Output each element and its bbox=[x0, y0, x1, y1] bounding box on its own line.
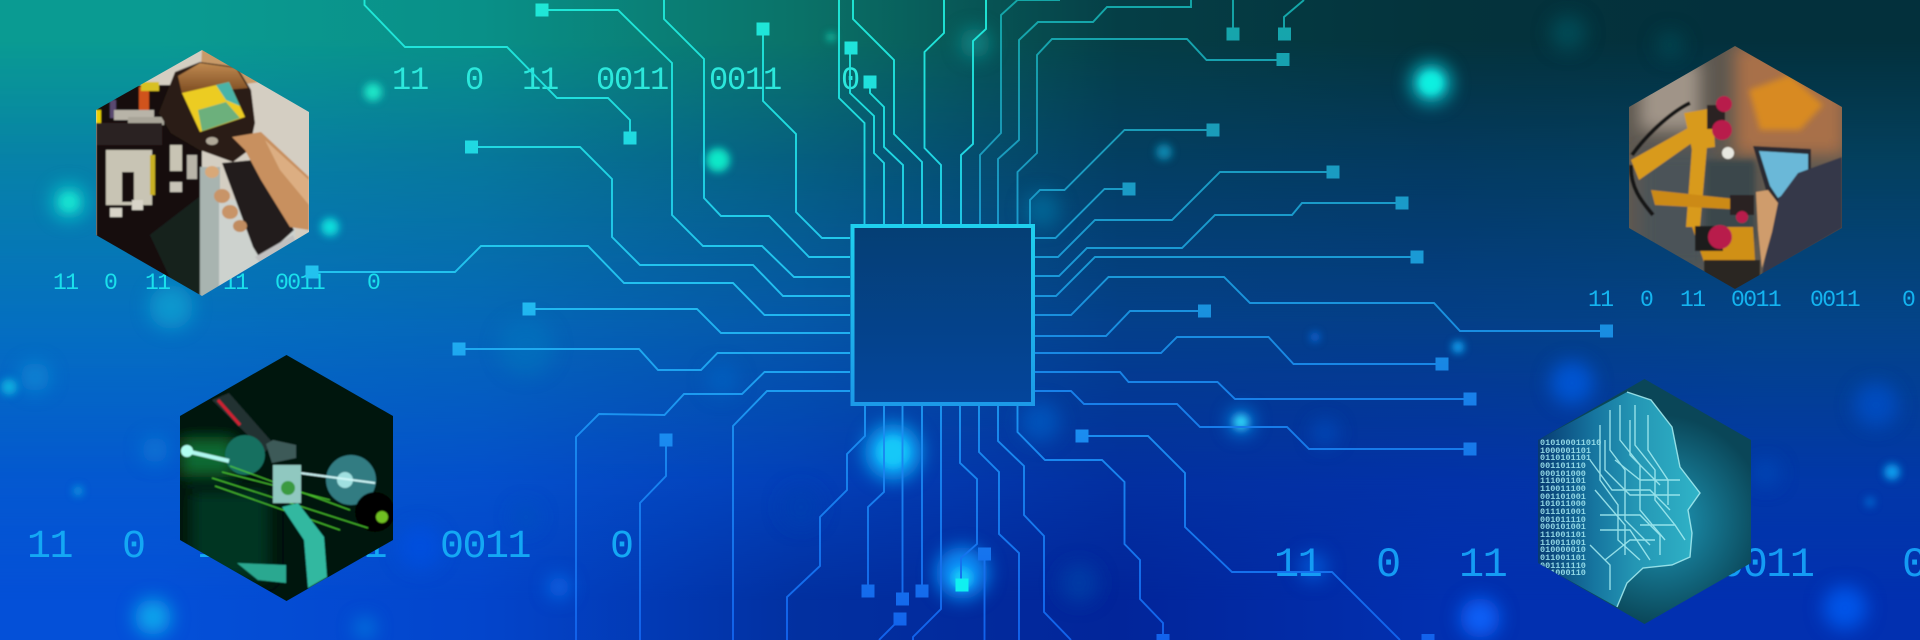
binary digits row: top left: 0011 bbox=[709, 62, 781, 99]
binary digits row: mid left: 11 bbox=[53, 270, 78, 296]
binary digits row: bottom left: 0 bbox=[122, 525, 145, 570]
binary column: 011101001 bbox=[1540, 507, 1586, 517]
binary digits row: mid right: 0011 bbox=[1731, 287, 1781, 313]
binary digits row: mid left: 0 bbox=[367, 270, 380, 296]
binary digits row: bottom right: 11 bbox=[1274, 541, 1322, 589]
binary column: 101011000 bbox=[1540, 499, 1586, 509]
binary column: 101000110 bbox=[1540, 568, 1586, 578]
binary column: 111001101 bbox=[1540, 476, 1586, 486]
binary digits row: mid right: 11 bbox=[1680, 287, 1705, 313]
binary digits row: bottom left: 11 bbox=[27, 525, 73, 570]
binary digits row: mid left: 0011 bbox=[275, 270, 325, 296]
binary column: 110011100 bbox=[1540, 484, 1586, 494]
binary digits row: top left: 11 bbox=[522, 62, 558, 99]
thermal camera bbox=[159, 62, 255, 162]
binary digits row: top left: 11 bbox=[392, 62, 428, 99]
binary column: 001111110 bbox=[1540, 561, 1586, 571]
robot arm bbox=[1631, 96, 1760, 290]
binary column: 001101110 bbox=[1540, 461, 1586, 471]
binary digits row: top left: 0011 bbox=[596, 62, 668, 99]
binary column: 000101000 bbox=[1540, 469, 1586, 479]
binary digits row: mid right: 0011 bbox=[1810, 287, 1860, 313]
circuit traces: left and top side bbox=[312, 0, 1400, 640]
binary digits row: mid right: 11 bbox=[1588, 287, 1613, 313]
binary column: 001011110 bbox=[1540, 515, 1586, 525]
hexagon photo: robot arm and tablet bbox=[1625, 40, 1845, 295]
binary column: 0110101101 bbox=[1540, 453, 1591, 463]
binary digits row: bottom left: 0 bbox=[610, 525, 633, 570]
binary column: 001101001 bbox=[1540, 492, 1586, 502]
binary column: 010100011010 bbox=[1540, 438, 1601, 448]
bright connector pad bbox=[956, 578, 968, 592]
binary column: 111001101 bbox=[1540, 530, 1586, 540]
binary digits row: bottom left: 0011 bbox=[440, 525, 531, 570]
binary digits row: top left: 0 bbox=[465, 62, 483, 99]
electrical panel bbox=[96, 82, 202, 300]
binary digits row: bottom left: 0011 bbox=[296, 525, 387, 570]
operator bbox=[1762, 157, 1842, 275]
binary column bbox=[1540, 438, 1601, 578]
binary column: 1000001101 bbox=[1540, 446, 1591, 456]
binary digits row: mid right: 0 bbox=[1640, 287, 1653, 313]
binary digits row: bottom left: 11 bbox=[197, 525, 243, 570]
binary digits row: mid left: 0 bbox=[104, 270, 117, 296]
binary digits row: mid left: 11 bbox=[223, 270, 248, 296]
binary digits row: bottom right: 0 bbox=[1376, 541, 1400, 589]
head circuit lines bbox=[1590, 392, 1700, 607]
connector pads: right bbox=[1122, 28, 1613, 456]
binary column: 110011001 bbox=[1540, 538, 1586, 548]
hexagon photo: laser optics lab bbox=[175, 350, 400, 605]
hexagon photo: thermal camera inspection bbox=[90, 45, 315, 300]
tablet bbox=[1753, 146, 1811, 207]
circuit traces: right side bbox=[980, 0, 1606, 449]
laser beams bbox=[182, 450, 375, 530]
hexagon image: AI head made of circuits bbox=[1530, 375, 1755, 630]
binary digits row: top left: 0 bbox=[841, 62, 859, 99]
binary digits row: bottom right: 11 bbox=[1459, 541, 1507, 589]
binary digits row: bottom right: 0011 bbox=[1719, 541, 1814, 589]
connector pads: left and bottom bbox=[306, 4, 1434, 640]
binary column: 000101001 bbox=[1540, 522, 1586, 532]
binary column: 010000010 bbox=[1540, 545, 1586, 555]
binary digits row: mid right: 0 bbox=[1902, 287, 1915, 313]
central processor chip bbox=[852, 226, 1033, 404]
binary column: 011001101 bbox=[1540, 553, 1586, 563]
hand bbox=[232, 132, 309, 230]
binary digits row: mid left: 11 bbox=[145, 270, 170, 296]
